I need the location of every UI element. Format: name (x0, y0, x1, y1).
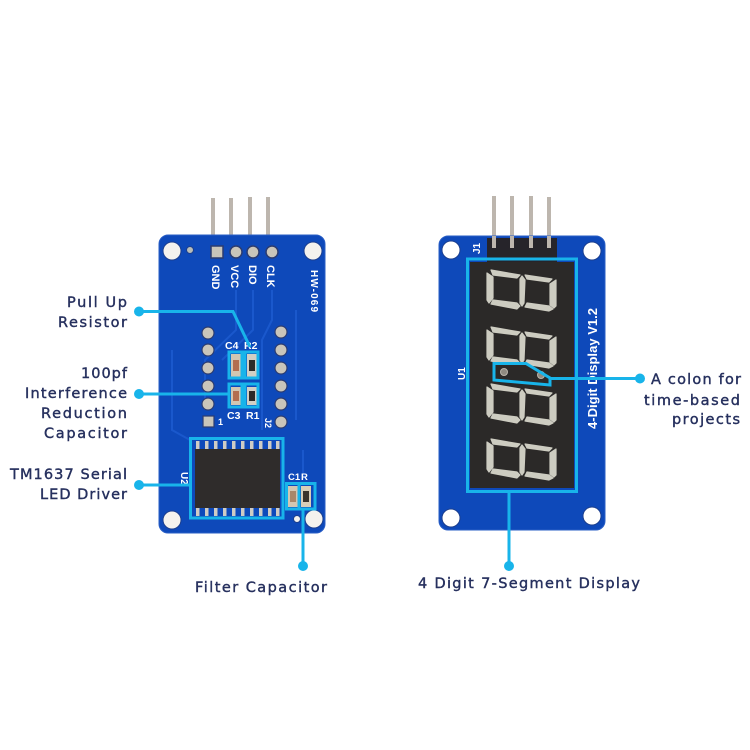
highlight box, bottom (229, 384, 258, 407)
highlight box (190, 438, 283, 518)
label (58, 295, 127, 331)
mounting holes, front (442, 241, 601, 527)
pointer dot (635, 374, 645, 384)
callout: filter capacitor (195, 484, 327, 596)
callout: pull up resistor (58, 295, 258, 378)
silkscreen labels, front: J1 (472, 242, 483, 254)
label: Resistor (58, 315, 127, 331)
colon area (494, 364, 550, 385)
callout: 4 digit display (418, 259, 640, 592)
silkscreen labels, front: U1 (457, 367, 468, 380)
label: 4 Digit 7-Segment Display (418, 576, 640, 592)
pointer dot (134, 389, 144, 399)
silkscreen component labels (178, 340, 308, 485)
header pads, back (211, 246, 278, 258)
model label: HW-069 (308, 270, 319, 312)
label: projects (672, 412, 740, 428)
label (9, 467, 127, 503)
pins over header (492, 236, 551, 248)
label: Filter Capacitor (195, 580, 327, 596)
digit 3 (487, 384, 556, 425)
pin labels (209, 265, 276, 290)
silkscreen component labels: C3 (227, 410, 241, 422)
label (644, 372, 741, 428)
pin labels: GND (209, 265, 221, 290)
highlight box (286, 484, 315, 509)
pointer line (508, 491, 510, 562)
highlight box (494, 364, 550, 385)
pointer dot (134, 306, 144, 316)
digit 4 (487, 439, 556, 480)
callout: colon (494, 364, 741, 428)
pointer line (550, 377, 638, 380)
silkscreen component labels: U2 (178, 472, 189, 485)
front board module (439, 196, 605, 530)
silkscreen labels, front: 4-Digit Display V1.2 (585, 308, 600, 429)
silkscreen component labels: C1 (288, 472, 301, 483)
label: TM1637 Serial (9, 467, 127, 483)
seven-segment display body (470, 262, 574, 488)
silkscreen component labels: R (301, 472, 308, 483)
pin labels: VCC (228, 265, 240, 288)
TM1637 chip (195, 441, 280, 516)
pointer dot (134, 480, 144, 490)
header plastic (487, 238, 557, 262)
label (25, 366, 128, 442)
pin labels: DIO (246, 265, 258, 285)
label: time-based (644, 393, 740, 409)
display solder pads (202, 326, 287, 428)
silkscreen component labels: R1 (246, 410, 260, 422)
highlight box (468, 259, 576, 492)
label: Reduction (41, 406, 127, 422)
PCB back (159, 235, 325, 533)
label: Capacitor (44, 426, 127, 442)
silkscreen component labels: C4 (225, 340, 239, 352)
silkscreen labels, front (457, 242, 600, 429)
back board module (159, 197, 325, 533)
digit 2 (487, 327, 556, 368)
PCB front (439, 236, 605, 530)
pointer dot (298, 561, 308, 571)
label: 100pf (81, 366, 128, 382)
pin labels: CLK (264, 265, 276, 288)
header pins, back (211, 197, 270, 236)
mounting holes, back (163, 242, 323, 529)
pointer dot (504, 561, 514, 571)
pointer line (137, 392, 229, 396)
silkscreen component labels: 1 (218, 417, 223, 427)
digit 1 (487, 270, 556, 311)
pointer line (137, 312, 250, 347)
label: LED Driver (40, 487, 127, 503)
callout: interference reduction capacitor (25, 366, 258, 442)
callout: TM1637 driver (9, 438, 283, 518)
silkscreen component labels: R2 (244, 340, 258, 352)
SMD resistors and capacitors (231, 354, 311, 507)
header pins, front (492, 196, 551, 242)
copper traces, back (172, 290, 303, 480)
label: Pull Up (67, 295, 127, 311)
label: Interference (25, 386, 127, 402)
highlight box, top (229, 352, 258, 378)
label: A colon for (651, 372, 741, 388)
pointer line (302, 509, 304, 562)
silkscreen component labels: J2 (263, 418, 273, 428)
pointer line (137, 484, 190, 486)
